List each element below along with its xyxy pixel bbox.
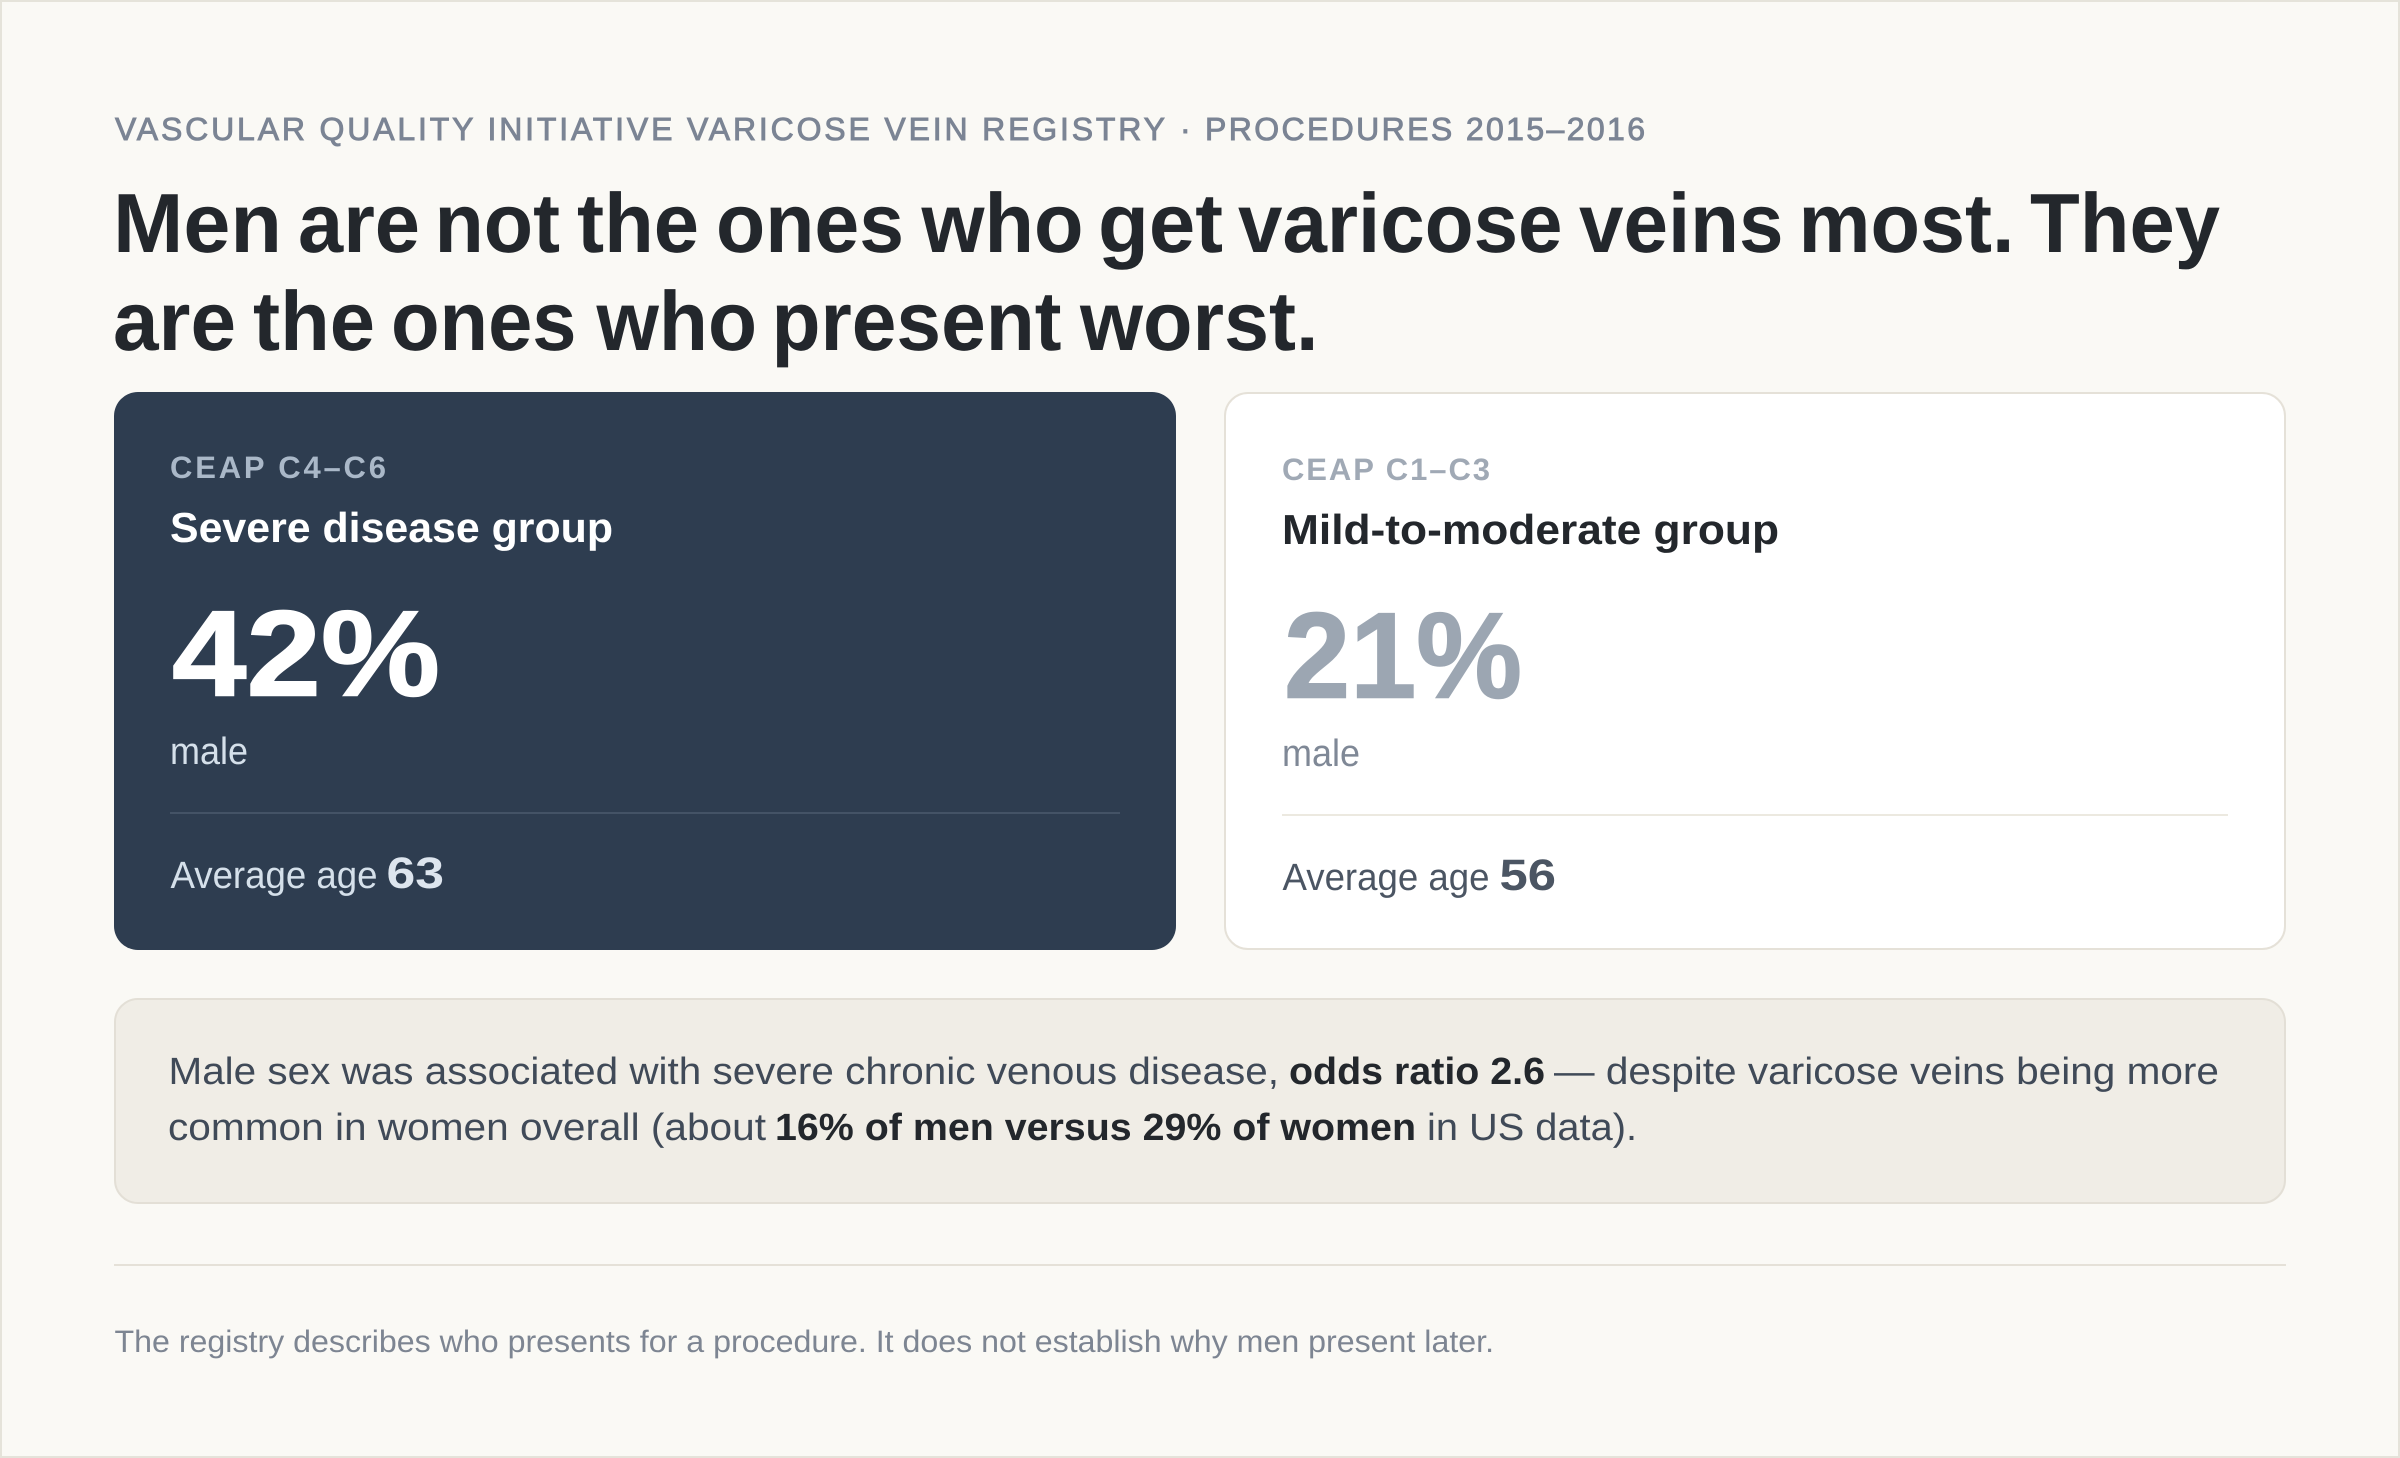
label: CEAP C1–C3: CEAP C1–C3: [1282, 452, 1490, 487]
title: present: [772, 274, 1062, 368]
title: veins: [1579, 176, 1784, 270]
callout text: in US data).: [1427, 1107, 1637, 1149]
eyebrow: data source: [115, 111, 1645, 147]
callout text: odds ratio 2.6: [1289, 1051, 1545, 1093]
title: the: [253, 274, 375, 368]
footnote: The registry describes who presents for a procedure. It does not establish why men present later.: [114, 1324, 1494, 1359]
heading: mild-to-moderate group: Mild-to-moderate group: [1282, 506, 1779, 553]
callout text: — despite varicose veins being more: [1554, 1051, 2219, 1093]
callout text: 16% of men versus 29% of women: [775, 1107, 1416, 1149]
eyebrow: data source: ·: [1180, 111, 1191, 147]
eyebrow: data source: PROCEDURES 2015–2016: [1205, 111, 1645, 147]
card background white: [1225, 393, 2285, 949]
average age label: Average age: [170, 855, 378, 897]
title: most.: [1798, 176, 2014, 270]
average age label: Average age: [1282, 857, 1490, 899]
heading: severe disease group: Severe disease group: [170, 504, 613, 551]
title: ones: [716, 176, 904, 270]
stat caption: male: male: [1282, 733, 1360, 775]
average age row: [170, 849, 444, 898]
stat caption: male: male: [170, 731, 248, 773]
title: are: [298, 176, 420, 270]
callout text: [168, 1051, 2219, 1149]
average age value: 56: 56: [1500, 851, 1556, 900]
panel: mild-to-moderate group: [1225, 393, 2285, 949]
title: who: [596, 274, 757, 368]
callout: odds ratio: [115, 999, 2285, 1203]
card background dark: [114, 392, 1176, 950]
title: Men: [113, 176, 282, 270]
label: CEAP C4–C6: CEAP C4–C6: [170, 450, 386, 485]
title: not: [434, 176, 560, 270]
stat: 42%: 42%: [172, 586, 440, 722]
average age row: [1282, 851, 1556, 900]
callout text: Male sex was associated with severe chronic venous disease,: [168, 1051, 1279, 1093]
title: who: [921, 176, 1084, 270]
title: [113, 176, 2220, 368]
title: worst.: [1079, 274, 1318, 368]
stat: 21%: 21%: [1284, 588, 1522, 724]
average age value: 63: 63: [386, 849, 444, 898]
title: They: [2030, 176, 2220, 270]
title: are: [113, 274, 236, 368]
panel: severe disease group: [114, 392, 1176, 950]
title: the: [577, 176, 699, 270]
eyebrow: data source: VASCULAR QUALITY INITIATIVE VARICOSE VEIN REGISTRY: [115, 111, 1165, 147]
callout text: common in women overall (about: [168, 1107, 766, 1149]
callout background: [115, 999, 2285, 1203]
title: get: [1098, 176, 1223, 270]
title: ones: [391, 274, 576, 368]
title: varicose: [1238, 176, 1562, 270]
